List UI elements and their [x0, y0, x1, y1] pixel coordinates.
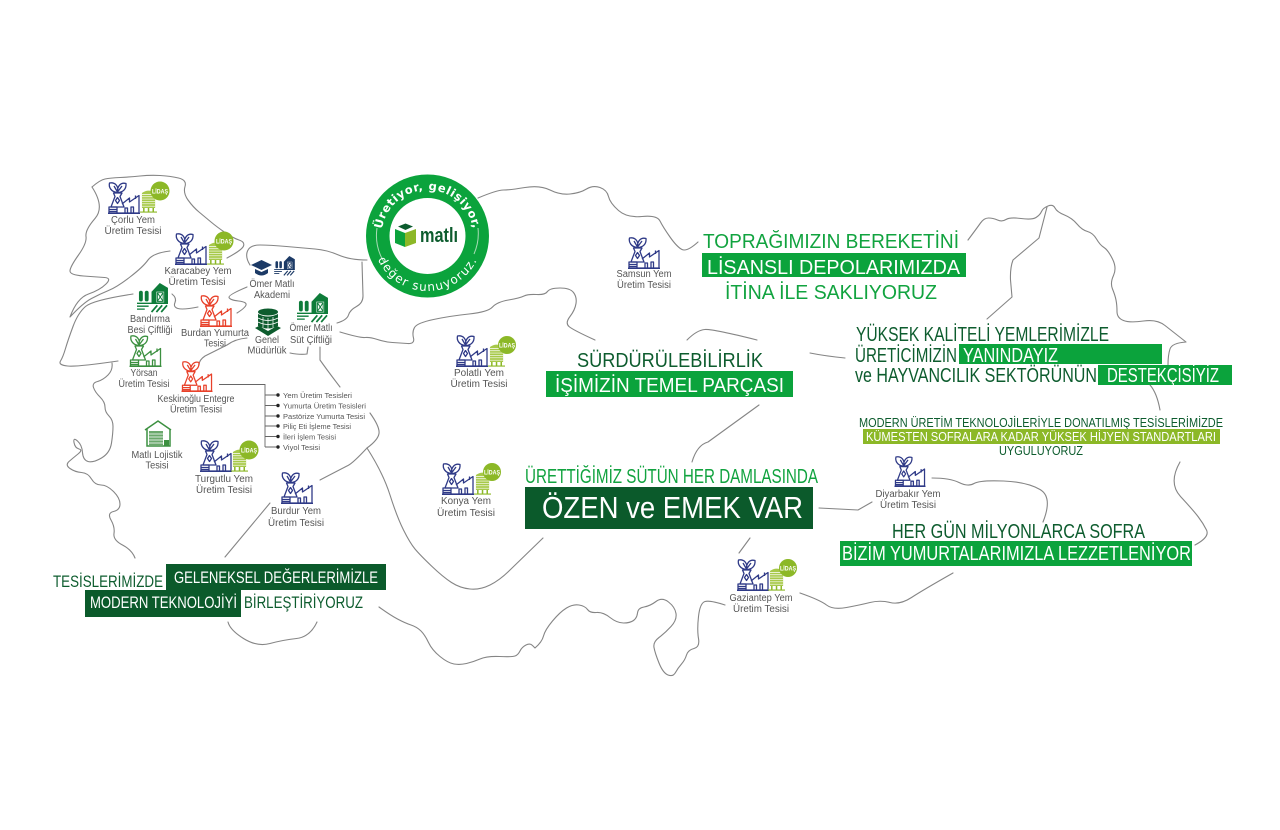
message: özen ve emek: ÖZEN ve EMEK VAR [542, 490, 803, 525]
facility: Ömer Matlı Akademi: Akademi [254, 290, 290, 301]
facility: Diyarbakır: Diyarbakır Yem [876, 489, 940, 500]
Keskinoğlu facilities list [219, 384, 366, 452]
Keskinoğlu facilities list: Yumurta Üretim Tesisleri [283, 402, 366, 410]
message: sürdürülebilirlik [546, 349, 793, 397]
message: geleneksel değerler [53, 564, 386, 617]
facility: Karacabey: Üretim Tesisi [168, 276, 226, 288]
facility: Matlı Lojistik: Matlı Lojistik [132, 450, 183, 461]
facility: Genel Müdürlük [248, 308, 287, 356]
facility: Diyarbakır [876, 457, 940, 511]
Keskinoğlu facilities list: İleri İşlem Tesisi [283, 432, 336, 442]
facility: Çorlu: LİDAŞ [152, 188, 168, 196]
facility: Polatlı: Polatlı Yem [454, 368, 504, 379]
badge slogan bottom: değer sunuyoruz. [378, 258, 476, 291]
message: geleneksel değerler: GELENEKSEL DEĞERLERİMİZLE [174, 568, 378, 587]
Keskinoğlu facilities list: Viyol Tesisi [283, 443, 320, 452]
facility: Ömer Matlı Akademi [250, 256, 295, 301]
facility: Burdur [268, 473, 324, 529]
facility: Karacabey: Karacabey Yem [164, 266, 232, 277]
facility: Yörsan [118, 336, 170, 390]
message: geleneksel değerler: TESİSLERİMİZDE [53, 572, 163, 591]
message: modern üretim teknolojileri: UYGULUYORUZ [999, 443, 1083, 458]
facility: Konya: LİDAŞ [484, 470, 500, 476]
facility: Ömer Matlı Süt Çiftliği: Ömer Matlı [290, 322, 332, 334]
message: geleneksel değerler: MODERN TEKNOLOJİYİ [90, 593, 237, 612]
message: modern üretim teknolojileri: MODERN ÜRETİM TEKNOLOJİLERİYLE DONATILMIŞ TESİSLERİMİZDE [859, 415, 1223, 430]
facility: Samsun [616, 238, 672, 291]
logo wordmark: matlı [420, 225, 458, 247]
facility: Keskinoğlu [158, 362, 235, 416]
message: her gün milyonlarca sofra: HER GÜN MİLYONLARCA SOFRA [892, 520, 1145, 543]
facility: Yörsan: Yörsan [130, 368, 158, 379]
facility: Konya: Üretim Tesisi [437, 507, 495, 519]
facility: Burdur: Burdur Yem [271, 506, 321, 517]
facility: Ömer Matlı Süt Çiftliği [290, 293, 332, 346]
facility: Turgutlu: Turgutlu Yem [195, 474, 253, 485]
icon: matlı cube [395, 224, 416, 247]
message: yüksek kaliteli yemlerimizle: ve HAYVANCILIK SEKTÖRÜNÜN [855, 364, 1097, 387]
facility: Polatlı [450, 336, 516, 390]
message: toprağımızın bereketini: İTİNA İLE SAKLIYORUZ [725, 281, 937, 304]
message: her gün milyonlarca sofra: BİZİM YUMURTALARIMIZLA LEZZETLENİYOR [842, 542, 1191, 565]
facility: Matlı Lojistik [132, 421, 183, 472]
facility: Konya [437, 463, 501, 519]
message: yüksek kaliteli yemlerimizle: DESTEKÇİSİYİZ [1107, 364, 1219, 387]
facility: Samsun: Samsun Yem [616, 269, 672, 280]
message: yüksek kaliteli yemlerimizle: YÜKSEK KALİTELİ YEMLERİMİZLE [856, 323, 1109, 346]
facility: Samsun: Üretim Tesisi [617, 279, 671, 291]
facility: Genel Müdürlük: Müdürlük [248, 346, 287, 356]
message: yüksek kaliteli yemlerimizle: YANINDAYIZ [963, 344, 1058, 367]
message: yüksek kaliteli yemlerimizle: ÜRETİCİMİZİN [855, 344, 957, 367]
facility: Gaziantep: Üretim Tesisi [733, 603, 789, 615]
facility: Ömer Matlı Akademi: Ömer Matlı [250, 278, 294, 290]
Keskinoğlu facilities list: Yem Üretim Tesisleri [283, 391, 352, 400]
Keskinoğlu facilities list: Pastörize Yumurta Tesisi [283, 412, 365, 421]
facility: Polatlı: Üretim Tesisi [450, 378, 508, 390]
facility: Burdur: Üretim Tesisi [268, 517, 324, 529]
facility: Gaziantep: Gaziantep Yem [730, 593, 792, 604]
facility: Gaziantep [730, 559, 797, 615]
facility: Çorlu [104, 182, 170, 237]
message: sürdürülebilirlik: SÜRDÜRÜLEBİLİRLİK [577, 349, 763, 372]
facility: Burdan Yumurta: Burdan Yumurta [181, 328, 249, 339]
facility: Gaziantep: LİDAŞ [780, 566, 796, 572]
message: toprağımızın bereketini: LİSANSLI DEPOLARIMIZDA [707, 256, 960, 279]
facility: Yörsan: Üretim Tesisi [118, 378, 170, 390]
facility: Turgutlu: LİDAŞ [241, 448, 257, 454]
facility: Genel Müdürlük: Genel [255, 335, 279, 346]
facility: Keskinoğlu: Üretim Tesisi [170, 404, 222, 416]
facility: Keskinoğlu: Keskinoğlu Entegre [158, 394, 235, 405]
facility: Bandırma: Bandırma [130, 314, 170, 325]
message: modern üretim teknolojileri: KÜMESTEN SOFRALARA KADAR YÜKSEK HİJYEN STANDARTLARI [866, 429, 1216, 444]
badge slogan top: Üretiyor, gelişiyor, [372, 184, 478, 228]
facility: Çorlu: Üretim Tesisi [104, 225, 162, 237]
facility: Bandırma: Besi Çiftliği [128, 325, 172, 336]
logo badge [366, 174, 489, 298]
facility: Polatlı: LİDAŞ [499, 342, 515, 350]
facility: Ömer Matlı Süt Çiftliği: Süt Çiftliği [290, 335, 332, 346]
facility: Burdan Yumurta: Tesisi [204, 338, 226, 350]
message: özen ve emek [525, 465, 819, 529]
facility: Çorlu: Çorlu Yem [111, 215, 155, 226]
facility: Turgutlu: Üretim Tesisi [196, 484, 252, 496]
facility: Karacabey [164, 232, 234, 288]
message: özen ve emek: ÜRETTİĞİMİZ SÜTÜN HER DAMLASINDA [525, 465, 819, 488]
message: sürdürülebilirlik: İŞİMİZİN TEMEL PARÇASI [555, 374, 784, 397]
facility: Karacabey: LİDAŞ [216, 238, 232, 246]
map of Turkey outline [60, 175, 1207, 676]
facility: Turgutlu [195, 440, 258, 496]
facility: Matlı Lojistik: Tesisi [146, 460, 168, 472]
message: yüksek kaliteli yemlerimizle [855, 323, 1232, 387]
facility: Konya: Konya Yem [441, 496, 491, 507]
Keskinoğlu facilities list: Piliç Eti İşleme Tesisi [283, 422, 351, 431]
message: modern üretim teknolojileri [859, 415, 1223, 458]
message: toprağımızın bereketini [702, 230, 966, 304]
facility: Burdan Yumurta [181, 296, 249, 350]
facility: Bandırma [128, 283, 172, 336]
message: her gün milyonlarca sofra [840, 520, 1192, 566]
message: toprağımızın bereketini: TOPRAĞIMIZIN BEREKETİNİ [703, 230, 959, 253]
facility: Diyarbakır: Üretim Tesisi [880, 499, 936, 511]
message: geleneksel değerler: BİRLEŞTİRİYORUZ [244, 593, 363, 612]
